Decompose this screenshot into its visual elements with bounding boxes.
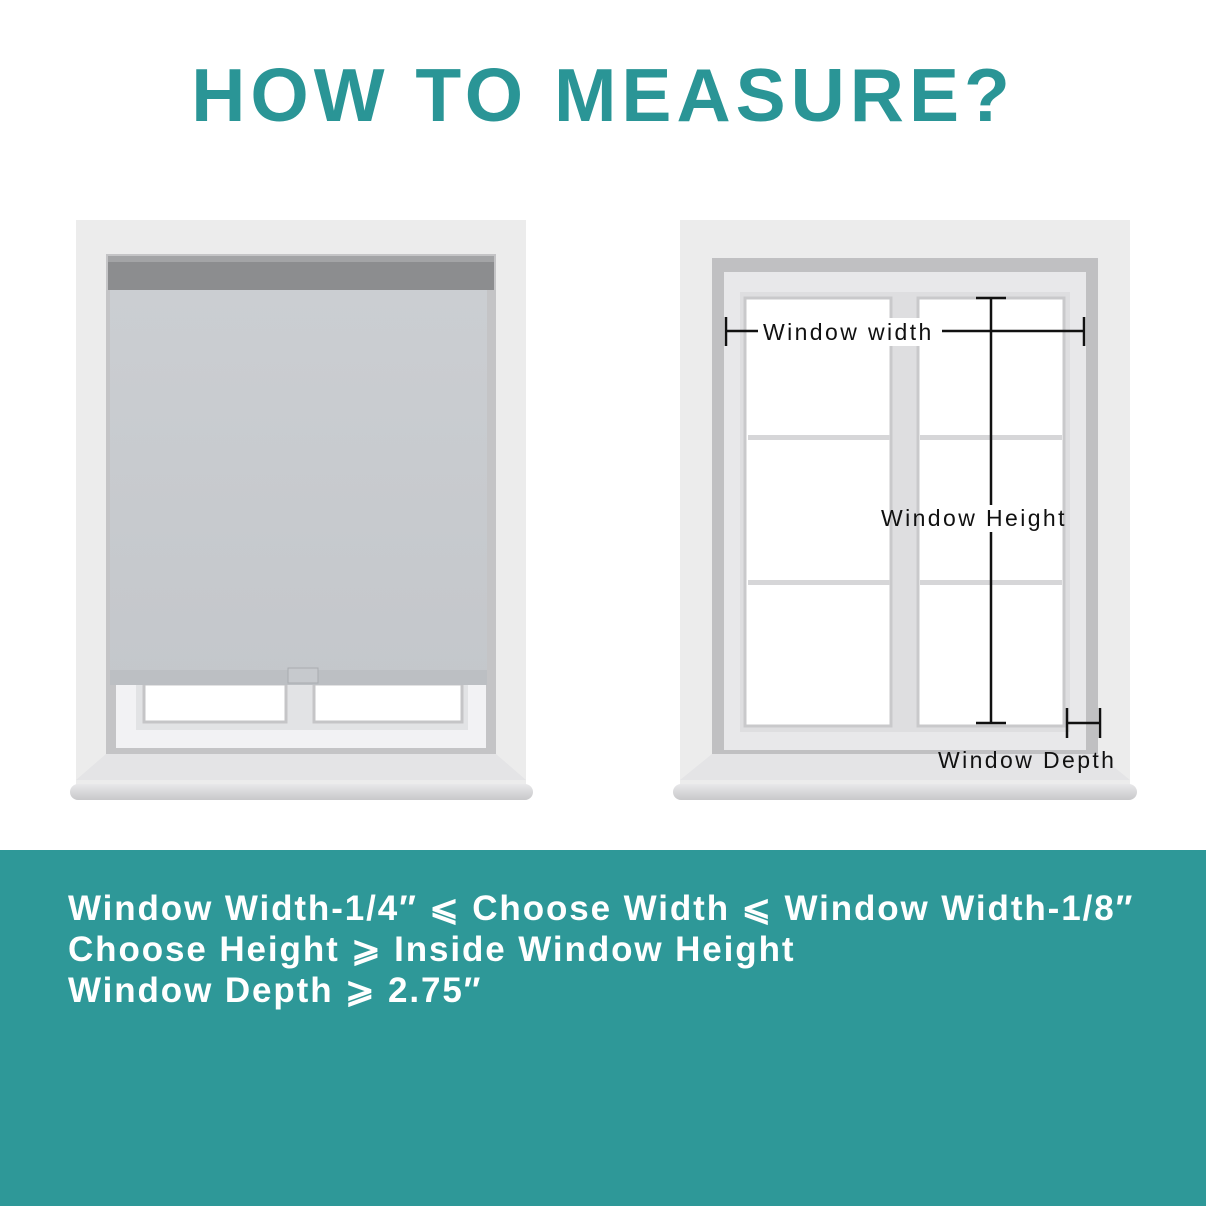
shade fabric <box>110 290 487 685</box>
requirements text: Window Width-1/4″ ⩽ Choose Width ⩽ Window Width-1/8″ <box>68 889 1134 928</box>
measure lines <box>726 298 1100 738</box>
requirements text: Window Depth ⩾ 2.75″ <box>68 971 482 1010</box>
labels <box>760 318 1116 773</box>
headrail <box>108 256 494 290</box>
requirements text: Choose Height ⩾ Inside Window Height <box>68 930 795 969</box>
left window with shade <box>70 220 533 800</box>
labels: Window Height <box>881 505 1067 531</box>
requirements text <box>68 889 1134 1010</box>
illustrations <box>70 220 1137 800</box>
labels: Window Depth <box>938 747 1116 773</box>
teal band <box>0 850 1206 1206</box>
labels: Window width <box>763 319 934 345</box>
title: HOW TO MEASURE? <box>191 53 1015 137</box>
right window with measurements <box>673 220 1137 800</box>
